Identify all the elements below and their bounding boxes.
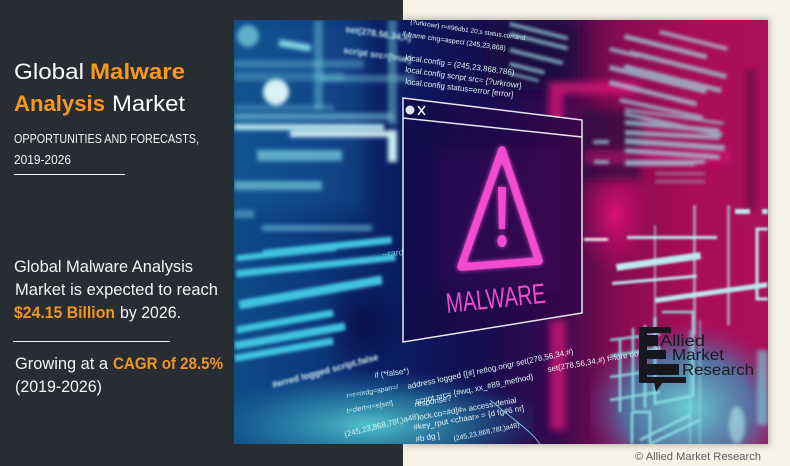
code text below window: (245,23,868,78f,)a48)	[453, 422, 520, 443]
code text below window: lock.co=#d]#» access.denial	[417, 396, 517, 422]
panel: malware hero image: local.config status=error [error]	[405, 77, 514, 99]
panel: malware hero image: local.config = (245,23,868,786)	[405, 53, 515, 77]
code text below window	[343, 347, 574, 444]
subtitle: OPPORTUNITIES AND FORECASTS,	[14, 132, 199, 146]
code text below window: r=r=nrdg=span=/	[346, 384, 399, 400]
blurred teal code, upper right	[509, 22, 728, 183]
market size text: $24.15 Billion	[14, 304, 115, 322]
market size text: Global Malware Analysis	[14, 258, 193, 276]
code text below window: script src= {#wq, xx_#89_method}	[415, 372, 534, 406]
CAGR text: CAGR of 28.5%	[113, 355, 223, 373]
blurred code heading lower left: #erred logged script.false	[271, 352, 379, 390]
logo wordmark	[660, 333, 754, 379]
hero: malware alert window	[403, 98, 582, 342]
panel: malware hero image: {?urkrowr} r=#96db1 20,s status.corrand	[410, 19, 526, 42]
subtitle: 2019-2026	[14, 153, 71, 167]
sharp code text above window: set(278.56,34,#)	[345, 24, 412, 43]
market size text	[14, 258, 218, 322]
panel: malware hero image	[234, 19, 768, 444]
code text below window: response?	[414, 394, 453, 409]
logo: Allied Market Research	[639, 327, 754, 392]
CAGR text: Growing at a	[15, 355, 109, 373]
logo wordmark: Research	[682, 362, 754, 379]
code text below window: (245,23,868,78f,)a48)	[343, 412, 420, 439]
sharp code text above window	[343, 24, 412, 65]
code line lower centre: set(278,56,34,#) f=fore dog=spr/	[547, 345, 662, 374]
subtitle	[14, 132, 199, 167]
pink glow bracket behind window	[549, 82, 730, 430]
blurred blue code, upper left	[234, 20, 415, 231]
title	[14, 59, 185, 116]
copyright: © Allied Market Research	[635, 451, 761, 463]
code text below window: t=clert=r=e[set]	[346, 400, 394, 415]
title: Malware	[90, 59, 185, 84]
CAGR text	[15, 355, 223, 396]
code text below window: #b dg ]	[415, 431, 440, 444]
icon: warning triangle	[461, 150, 539, 267]
malware label: MALWARE	[444, 278, 547, 319]
market size text: Market is expected to reach	[15, 281, 218, 299]
title: Market	[112, 91, 185, 116]
code text below window: #key_rput <chaar» = {d fg#6 nr]	[413, 404, 525, 432]
panel: malware hero image: local.config script src= {?urkrowr}	[405, 65, 523, 90]
title: Global	[14, 59, 84, 84]
code fragment left of window: --rard	[381, 247, 404, 259]
logo wordmark: Market	[672, 347, 725, 364]
CAGR text: (2019-2026)	[15, 378, 102, 396]
teal grid graphic, bottom right	[610, 312, 700, 444]
panel: dark left background	[0, 0, 403, 466]
panel: malware hero image: if-frame cing=aspecl (245,23,868)	[402, 31, 506, 53]
sharp code text above window: script src=[true]	[343, 45, 412, 65]
icon: logo document mark	[639, 327, 686, 392]
blurred cyan code, lower left	[234, 237, 396, 362]
market size text: by 2026.	[120, 304, 181, 322]
code text below window: if (*false*)	[374, 366, 410, 380]
panel: cream right background	[403, 0, 790, 466]
blurred shapes bottom right	[729, 406, 745, 444]
title: Analysis	[14, 91, 105, 116]
logo wordmark: Allied	[660, 333, 705, 350]
image shadow	[403, 18, 770, 446]
code text below window: address logged {[#] retlog.origr set(278,56,34,#)	[407, 347, 574, 391]
